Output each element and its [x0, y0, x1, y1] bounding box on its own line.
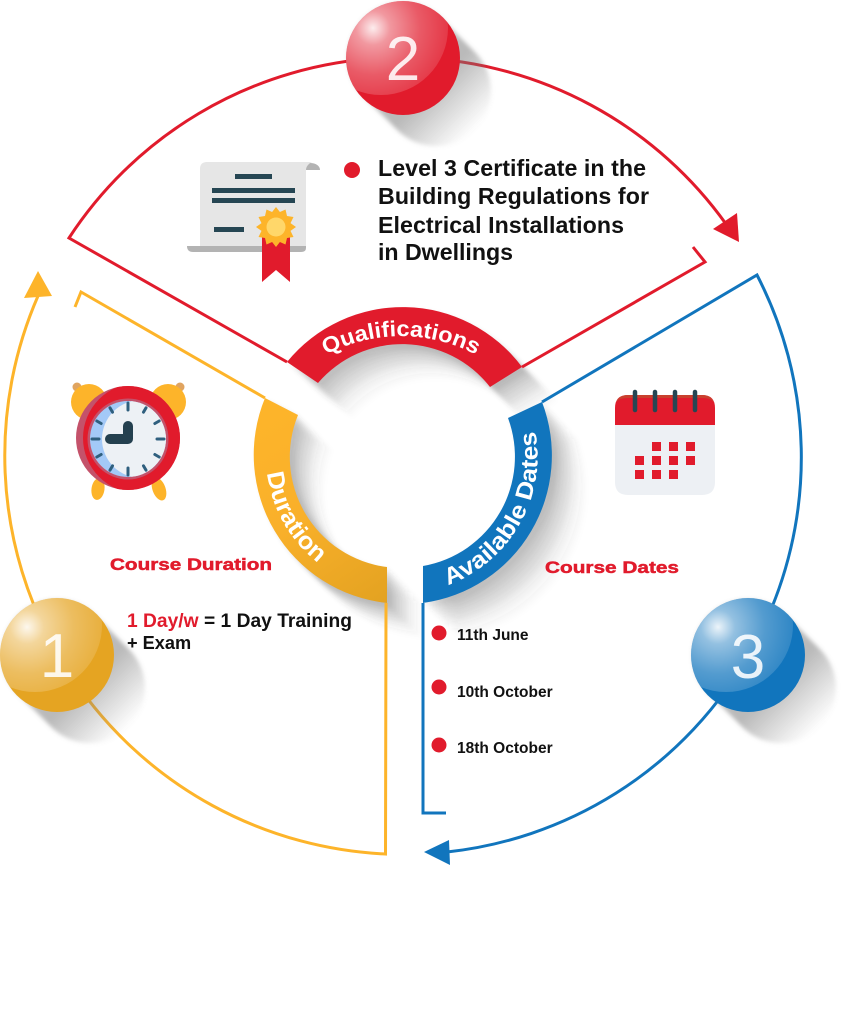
icon: certificate	[187, 162, 320, 282]
date: 18th October	[432, 738, 553, 757]
date: 10th October: 10th October	[457, 684, 553, 701]
qualification text: Level 3 Certificate in the	[378, 155, 646, 181]
ring segment: Duration: Duration	[267, 472, 324, 562]
ring segment: Qualifications	[287, 307, 522, 387]
qualification text: Building Regulations for	[378, 183, 649, 209]
heading: Course Dates: Course Dates	[545, 558, 679, 577]
sphere 2: 2	[386, 25, 420, 94]
sphere 1: 1	[40, 622, 74, 691]
ring segment: Qualifications: Qualifications	[322, 320, 479, 354]
heading: Course Duration: Course Duration	[110, 555, 272, 574]
yellow outline with arrow	[5, 271, 386, 854]
ring long shadow	[256, 309, 587, 638]
qualification text: in Dwellings	[378, 239, 513, 265]
ring segment: Duration	[254, 398, 387, 603]
sphere 1	[0, 558, 114, 712]
qualification text	[378, 155, 649, 265]
date: 11th June	[432, 626, 529, 644]
duration text: + Exam	[127, 633, 191, 653]
red outline with arrow	[69, 58, 739, 367]
blue outline with arrow	[423, 275, 801, 865]
sphere 2	[314, 0, 460, 115]
duration text	[127, 611, 352, 653]
duration text: 1 Day/w = 1 Day Training	[127, 611, 352, 632]
icon: calendar	[615, 392, 715, 495]
date: 18th October: 18th October	[457, 740, 553, 757]
sphere 3	[659, 558, 805, 712]
sphere 3: 3	[731, 623, 765, 692]
qualification text: Electrical Installations	[378, 212, 624, 238]
qualification bullet	[344, 162, 360, 178]
icon: alarm clock	[71, 382, 193, 502]
date: 11th June: 11th June	[457, 627, 529, 644]
ring segment: Available Dates: Available Dates	[448, 432, 538, 586]
ring segment: Available Dates	[423, 402, 552, 603]
date: 10th October	[432, 680, 553, 701]
